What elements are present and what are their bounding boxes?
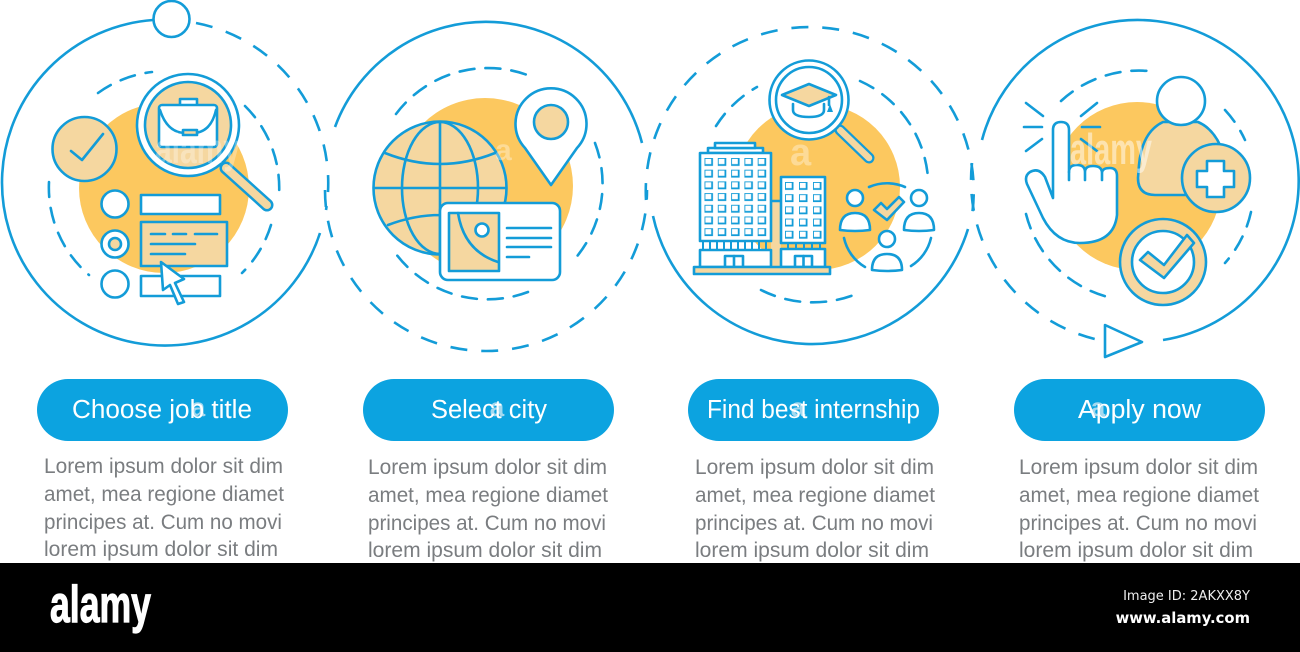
icon: team with check [840,183,934,271]
step 2 text: principes at. Cum no movi [368,511,606,535]
icon: pointing hand [1024,103,1117,243]
icon: magnifier with graduation cap [770,60,869,158]
watermark over illustrations: alamy [1070,125,1152,174]
image id: Image ID: 2AKXX8Y [1123,589,1250,604]
icon: end arrow [1105,325,1142,357]
step 4 button: Apply now [1078,396,1202,424]
step 2 text: Lorem ipsum dolor sit dim [368,455,607,479]
step 3 text: lorem ipsum dolor sit dim [695,538,929,562]
watermark over illustrations: alamy [155,125,240,172]
step 2 button: Select city [431,396,547,424]
step 1 button [37,379,288,441]
step 2 text: amet, mea regione diamet [368,483,608,507]
footer bar [0,563,1300,652]
icon: check badge [52,117,116,181]
step 3 text: principes at. Cum no movi [695,511,933,535]
step 3 text: amet, mea regione diamet [695,483,935,507]
icon: buildings [694,143,830,274]
website: www.alamy.com [1116,610,1250,627]
step 1 button: Choose job title [72,396,252,424]
panel: choose job title illustration [2,1,328,346]
step 4 text: amet, mea regione diamet [1019,483,1259,507]
step 4 button: a [1091,392,1106,422]
panel: find best internship illustration [646,27,974,344]
step 3 button [688,379,939,441]
watermark over illustrations: a [790,132,812,174]
step 1 text: Lorem ipsum dolor sit dim [44,454,283,478]
icon: magnifier with briefcase [137,74,267,205]
step 1 button: a [191,392,206,422]
watermark over illustrations: a [495,134,512,167]
panel: apply now illustration [971,20,1299,357]
panel: select city illustration [325,22,647,351]
footer logo: alamy [50,576,151,634]
icon: check seal [1120,219,1206,305]
step 4 text: lorem ipsum dolor sit dim [1019,538,1253,562]
step 1 text: principes at. Cum no movi [44,510,282,534]
step 4 text [1019,455,1259,562]
watermark over illustrations [155,125,1152,174]
step 2 text: lorem ipsum dolor sit dim [368,538,602,562]
form options [102,190,227,298]
icon: location pin [516,88,587,185]
step 2 text [368,455,608,562]
step 1 text: lorem ipsum dolor sit dim [44,537,278,561]
step 3 text [695,455,935,562]
icon: start node [154,1,190,37]
icon: globe [374,122,506,254]
step 4 text: principes at. Cum no movi [1019,511,1257,535]
step 4 text: Lorem ipsum dolor sit dim [1019,455,1258,479]
step 2 button [363,379,614,441]
step 2 button: a [490,392,505,422]
step 1 text [44,454,284,561]
step 3 button: a [791,392,806,422]
step 4 button [1014,379,1265,441]
step 1 text: amet, mea regione diamet [44,482,284,506]
step 3 button: Find best internship [707,396,920,424]
icon: id card [440,203,560,280]
icon: user with plus [1138,77,1250,212]
step 3 text: Lorem ipsum dolor sit dim [695,455,934,479]
icon: cursor [161,262,184,304]
